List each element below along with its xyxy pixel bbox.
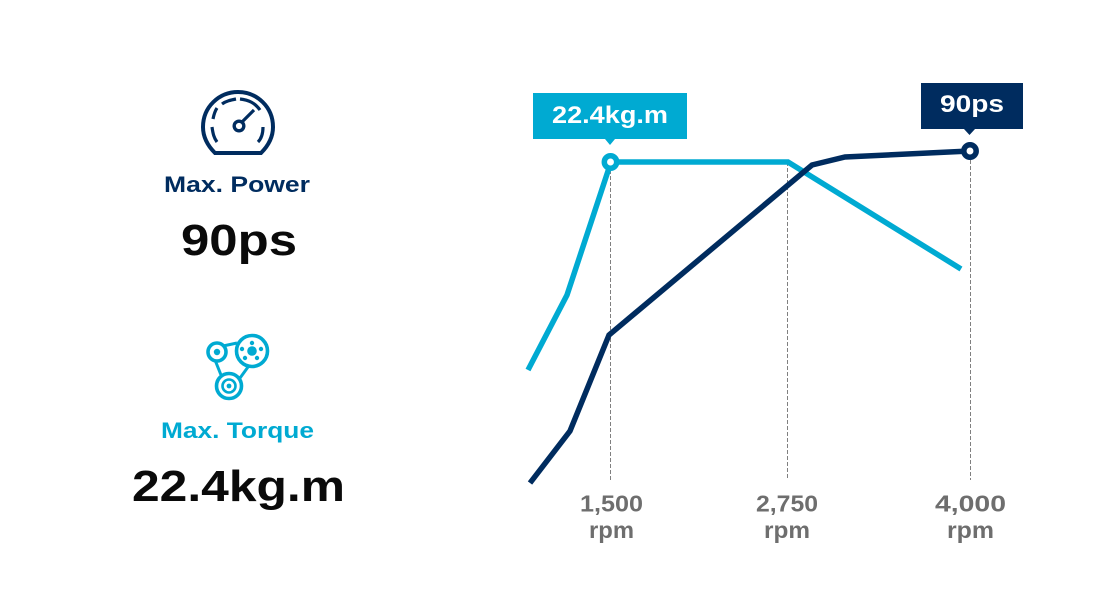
axis label: 2,750 rpm: rpm [764,517,810,543]
callout: power [921,83,1023,135]
heading: max torque: Max. Torque [161,418,314,443]
line: power curve [530,151,970,483]
icon: speedometer [203,92,273,153]
axis label: 1,500 rpm: rpm [589,517,634,543]
line: torque curve [528,162,961,370]
axis label: 1,500 rpm: 1,500 [580,490,643,516]
axis label: 4,000 rpm: 4,000 [935,490,1006,516]
dashed guide lines [610,160,970,480]
callout: power: 90ps [940,91,1004,118]
axis label: 2,750 rpm [756,490,818,543]
axis label: 1,500 rpm [580,490,643,543]
value: 90ps: 90ps [181,216,297,265]
value: 22.4kg.m: 22.4kg.m [132,462,345,511]
callout: torque [533,93,687,145]
icon: engine belt pulleys [208,336,268,398]
callout: torque: 22.4kg.m [552,102,668,129]
axis label: 4,000 rpm [935,490,1006,543]
heading: max power: Max. Power [164,172,310,197]
marker: power peak [964,145,976,157]
marker: torque peak [604,156,617,168]
axis label: 2,750 rpm: 2,750 [756,490,818,516]
axis label: 4,000 rpm: rpm [947,517,994,543]
